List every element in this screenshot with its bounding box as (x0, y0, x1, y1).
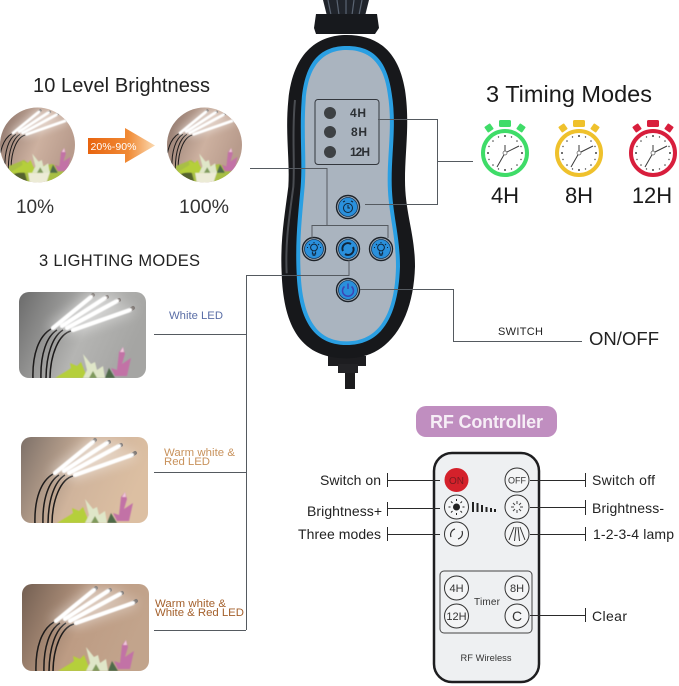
label: switch: SWITCH (498, 326, 543, 338)
button: mode (336, 238, 360, 260)
photo: lamp at 10% brightness (0, 107, 75, 184)
button: brightness right (370, 238, 392, 260)
label: warm white, white and red LED: White & Red LED (155, 607, 244, 619)
heading: 3 timing modes: 3 Timing Modes (486, 81, 652, 107)
label: warm white, white and red LED: Warm white & (155, 598, 226, 610)
photo: warm white and red LED (21, 437, 148, 525)
icon: green timer (483, 120, 527, 175)
button: three modes (444, 522, 468, 546)
LED timer indicators (315, 100, 379, 164)
heading pill: RF controller: RF Controller (430, 412, 543, 432)
callout lines: controller connections (154, 120, 582, 630)
arrow: 20%-90%: 20%-90% (90, 141, 136, 153)
icon: yellow timer (557, 120, 601, 175)
label: RF wireless: RF Wireless (460, 653, 512, 663)
panel: RF remote (434, 453, 539, 682)
LED timer indicators: 12H (350, 145, 370, 159)
label: switch off: Switch off (592, 472, 655, 488)
label: warm white, white and red LED (155, 598, 244, 619)
button: brightness plus (444, 495, 468, 519)
button: on (444, 468, 468, 492)
label: 100%: 100% (179, 196, 229, 218)
label: clear: Clear (592, 608, 627, 624)
label: warm white and red LED: Warm white & (164, 447, 235, 459)
timer group: Timer (474, 597, 501, 608)
label: warm white and red LED (164, 447, 235, 468)
arrow: 20%-90% (88, 128, 155, 163)
photo: lamp at 100% brightness (166, 107, 242, 184)
button: brightness minus (505, 495, 529, 519)
timer group: 4H (449, 583, 464, 595)
label: 1-2-3-4 lamp: 1-2-3-4 lamp (593, 526, 674, 542)
label: three modes: Three modes (298, 526, 381, 542)
photo: warm white, white and red LED (22, 584, 149, 673)
button: brightness left (302, 238, 326, 260)
remote callout lines (387, 473, 586, 622)
title: 10 level brightness: 10 Level Brightness (33, 75, 210, 97)
button: on: ON (449, 476, 464, 487)
button: off: OFF (508, 476, 526, 486)
label: 10%: 10% (16, 197, 54, 218)
button: timer (336, 196, 360, 218)
LED timer indicators: 4H (350, 106, 366, 120)
label: brightness plus: Brightness+ (307, 503, 382, 519)
button: off (505, 468, 529, 492)
label: 8H: 8H (565, 183, 593, 208)
timer group (440, 571, 532, 633)
LED timer indicators: 8H (351, 125, 367, 139)
controller cable top (314, 0, 379, 34)
button: power (336, 278, 360, 302)
label: switch on: Switch on (320, 472, 381, 488)
timer group: 8H (510, 583, 524, 595)
label: on/off: ON/OFF (589, 328, 659, 349)
controller cable bottom (328, 356, 366, 389)
heading: 3 lighting modes: 3 LIGHTING MODES (39, 252, 200, 270)
timer group: 12H (446, 611, 467, 623)
panel: wired controller (281, 35, 415, 358)
icon: red timer (631, 120, 675, 175)
label: brightness minus: Brightness- (592, 500, 664, 516)
brightness level bars (473, 502, 495, 512)
photo: white LED (19, 292, 146, 380)
label: white LED: White LED (169, 310, 223, 322)
label: 12H: 12H (632, 183, 672, 208)
heading pill: RF controller (416, 406, 557, 437)
label: warm white and red LED: Red LED (164, 456, 210, 468)
label: 4H: 4H (491, 183, 519, 208)
button: lamp selector (505, 522, 529, 546)
timer group: C (512, 608, 522, 624)
